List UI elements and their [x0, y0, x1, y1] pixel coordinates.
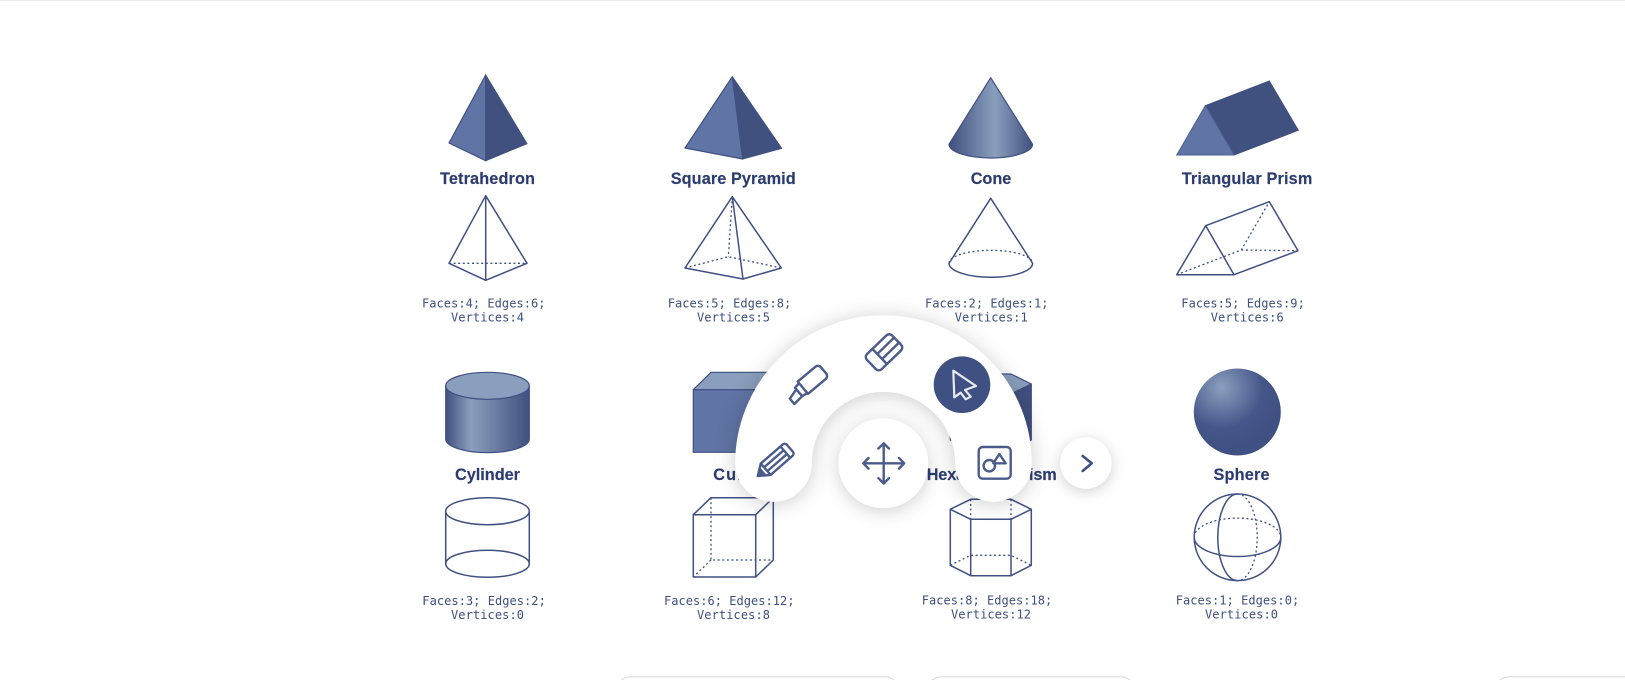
label: Sphere: Sphere: [1214, 466, 1270, 484]
solid square pyramid: [685, 77, 782, 159]
panel: cylinder: [422, 372, 546, 622]
icon: highlighter: [785, 364, 829, 405]
solid triangular prism: [1177, 81, 1298, 155]
properties: sphere: Faces:1; Edges:0;: [1176, 594, 1299, 608]
properties: square pyramid: Faces:5; Edges:8;: [668, 297, 791, 311]
properties: tetrahedron: Vertices:4: [451, 311, 524, 325]
properties: cube: [664, 594, 794, 622]
wireframe cylinder: [446, 498, 529, 577]
bottom button: left: [616, 677, 899, 680]
icon: chevron right: [1083, 456, 1092, 471]
properties: cylinder: Faces:3; Edges:2;: [422, 594, 546, 608]
next button: [1060, 437, 1112, 489]
properties: tetrahedron: Faces:4; Edges:6;: [422, 297, 546, 311]
solid sphere: [1194, 368, 1281, 456]
solid tetrahedron: [449, 75, 527, 161]
panel: cone: [925, 78, 1048, 325]
label: Hexagonal Prism: Hexagonal Prism: [927, 466, 1057, 484]
properties: hexagonal prism: Faces:8; Edges:18;: [922, 594, 1052, 608]
properties: triangular prism: Faces:5; Edges:9;: [1181, 297, 1305, 311]
move button: [838, 418, 928, 508]
properties: sphere: [1176, 594, 1299, 622]
wireframe square pyramid: [685, 197, 781, 279]
icon: selected cursor: [934, 356, 990, 413]
properties: hexagonal prism: Vertices:12: [951, 608, 1031, 622]
solid hexagonal prism: [950, 374, 1031, 450]
properties: cylinder: [422, 594, 546, 622]
properties: square pyramid: [668, 297, 791, 325]
properties: cube: Vertices:8: [697, 608, 770, 622]
properties: hexagonal prism: [922, 594, 1052, 622]
label: Square Pyramid: Square Pyramid: [671, 170, 796, 188]
label: Cylinder: Cylinder: [455, 466, 521, 484]
panel: tetrahedron: [422, 75, 546, 325]
properties: triangular prism: [1181, 297, 1305, 325]
properties: cube: Faces:6; Edges:12;: [664, 594, 794, 608]
wireframe cone: [949, 198, 1033, 277]
properties: sphere: Vertices:0: [1205, 608, 1278, 622]
wireframe sphere: [1194, 494, 1281, 581]
icon: move arrows: [863, 443, 904, 484]
properties: cylinder: Vertices:0: [451, 608, 524, 622]
menu arc background: [774, 354, 994, 464]
icon: eraser: [864, 333, 904, 372]
icon: pencil: [753, 443, 795, 482]
label: Cone: Cone: [971, 170, 1011, 188]
bottom button: right: [1495, 677, 1625, 680]
properties: cone: [925, 297, 1048, 325]
wireframe cube: [693, 498, 773, 577]
wireframe triangular prism: [1177, 202, 1298, 275]
panel: cube: [664, 372, 794, 622]
solid cylinder: [446, 372, 529, 453]
properties: cone: Vertices:1: [955, 311, 1028, 325]
panel: square pyramid: [668, 77, 796, 325]
icon: shapes: [979, 447, 1011, 479]
solid cube: [693, 372, 773, 452]
panel: triangular prism: [1177, 81, 1312, 325]
label: Triangular Prism: Triangular Prism: [1182, 170, 1312, 188]
properties: cone: Faces:2; Edges:1;: [925, 297, 1048, 311]
properties: square pyramid: Vertices:5: [697, 311, 770, 325]
bottom button: middle: [928, 677, 1135, 680]
wireframe tetrahedron: [449, 196, 527, 280]
properties: tetrahedron: [422, 297, 546, 325]
label: Cube: Cube: [713, 466, 757, 484]
panel: sphere: [1176, 368, 1299, 622]
properties: triangular prism: Vertices:6: [1211, 311, 1284, 325]
wireframe hexagonal prism: [950, 499, 1031, 576]
label: Tetrahedron: Tetrahedron: [440, 170, 535, 188]
panel: hexagonal prism: [922, 374, 1057, 622]
solid cone: [949, 78, 1033, 158]
radial tool menu: [753, 333, 1112, 508]
